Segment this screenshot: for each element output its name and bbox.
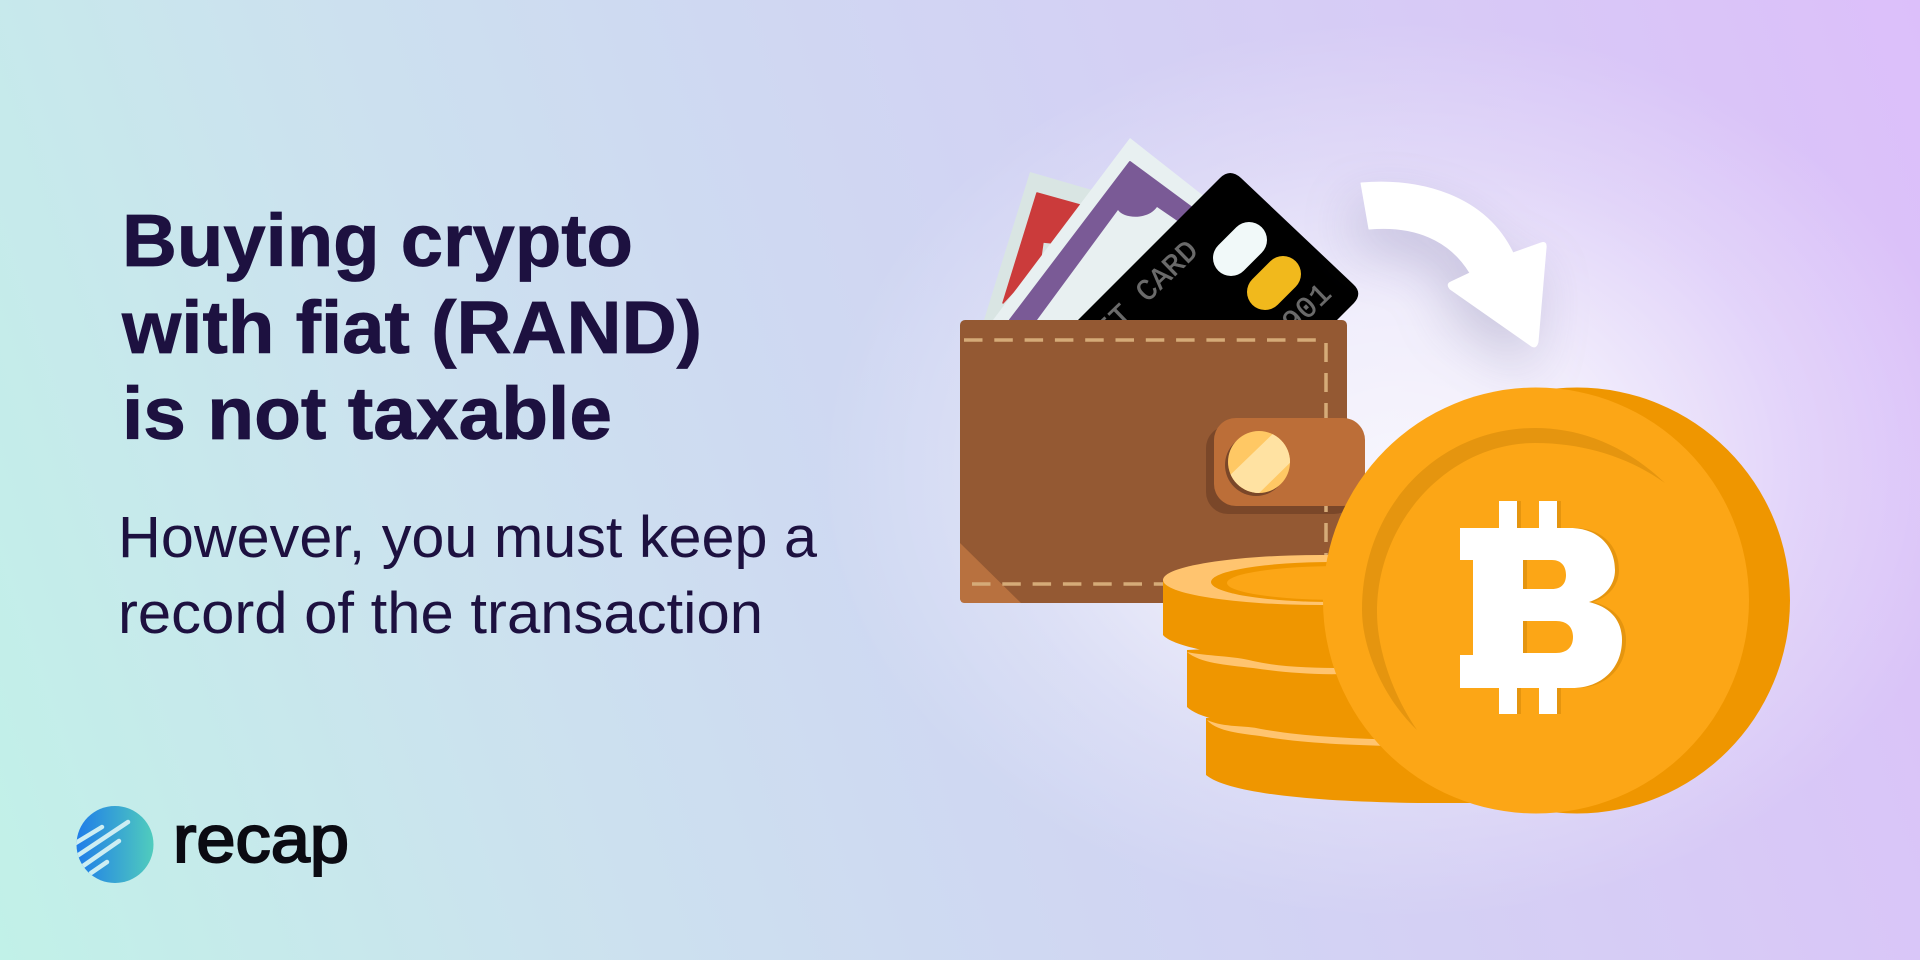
- bitcoin coin: [1323, 388, 1790, 814]
- red banknote: [984, 172, 1092, 320]
- inner crescent: [1362, 428, 1665, 730]
- arrow: [1361, 182, 1546, 347]
- subtitle: record of the transaction: [118, 581, 763, 646]
- logo icon: [74, 806, 154, 883]
- illustration: wallet and coins: [960, 138, 1790, 814]
- clasp button: [1225, 431, 1290, 496]
- wallet corner: [960, 543, 1021, 603]
- subtitle: [118, 505, 818, 646]
- bottom coin: [1206, 700, 1500, 803]
- purple banknote: [993, 138, 1205, 320]
- clasp shadow: [1206, 426, 1356, 514]
- title: with fiat (RAND): [121, 286, 702, 369]
- clasp: [1214, 418, 1365, 506]
- title: Buying crypto: [122, 199, 633, 282]
- stitching: [964, 340, 1326, 584]
- credit card: [1051, 173, 1358, 387]
- yellow chip: [1265, 274, 1283, 292]
- logo: recap: [74, 802, 349, 883]
- title: is not taxable: [122, 372, 612, 455]
- bitcoin symbol shadow: [1464, 501, 1626, 714]
- coin stack: [1163, 555, 1500, 803]
- bitcoin symbol: [1460, 501, 1622, 714]
- top coin: [1163, 555, 1479, 665]
- title: [121, 199, 702, 455]
- white chip: [1231, 240, 1249, 258]
- card number: 901: [1277, 278, 1340, 341]
- middle coin: [1187, 640, 1380, 735]
- logo wordmark: recap: [173, 802, 349, 877]
- card text: DEBIT CARD: [1051, 235, 1207, 387]
- subtitle: However, you must keep a: [118, 505, 818, 570]
- wallet: [960, 320, 1365, 603]
